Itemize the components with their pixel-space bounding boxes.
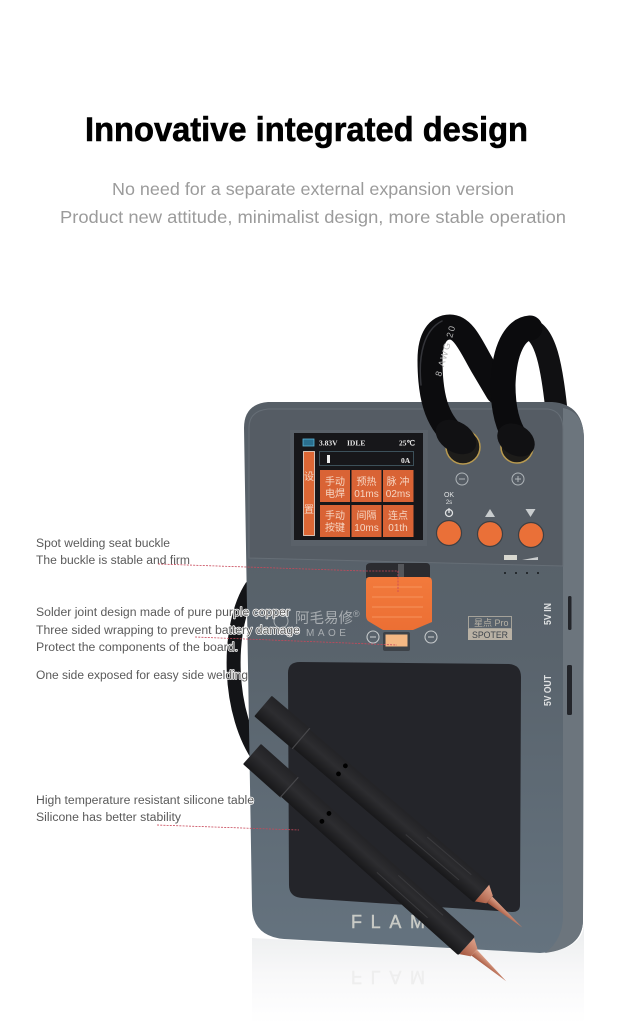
power icon: OK 2s: OK: [444, 492, 454, 499]
menu cells: 01ms: [354, 489, 379, 500]
cable: plus rear strand: [528, 329, 556, 406]
brand badge: SPOTER: 星点 Pro: [474, 618, 509, 628]
menu cells: 01th: [388, 523, 408, 534]
product: spot welder device: [234, 321, 584, 1024]
menu cells: [320, 470, 414, 537]
brand badge: SPOTER: SPOTER: [472, 630, 508, 641]
power icon: OK 2s: 2s: [446, 500, 452, 506]
polarity symbols: [456, 473, 524, 485]
menu cells: 手动: [325, 509, 345, 522]
floor reflection: [252, 925, 584, 1024]
subtitle text block: Product new attitude, minimalist design, more stable operation: [60, 207, 566, 227]
current bar: 0A: [401, 456, 411, 465]
annotation: silicone table: High temperature resistant silicone table: [36, 795, 254, 807]
menu cells: 按键: [325, 521, 345, 534]
welding pen: upper: [254, 696, 531, 938]
annotation: buckle: [36, 538, 398, 592]
brand: FLAM: FLAM: [351, 912, 425, 932]
orange buckle: [366, 577, 432, 630]
welding pen: lower: [243, 744, 515, 991]
status row: 25℃: [399, 438, 416, 448]
menu cells: 脉 冲: [387, 475, 409, 488]
watermark logo: MAOE: [306, 628, 349, 639]
side ports: [567, 596, 572, 715]
watermark logo: [274, 609, 360, 639]
buckle slot: [366, 563, 430, 578]
settings bar: [304, 452, 314, 536]
annotation: silicone table: [36, 795, 299, 830]
status row: IDLE: [347, 438, 365, 448]
status row: 3.83V: [319, 438, 338, 448]
settings bar: 置: [304, 504, 314, 516]
label: 5V IN: 5V IN: [543, 603, 554, 625]
indicator dots: [504, 572, 539, 574]
display screen: [294, 433, 423, 540]
screen bezel line: [290, 430, 428, 546]
cable: plus: [491, 328, 541, 463]
brand badge: SPOTER: [468, 616, 512, 641]
floor reflection: FLAM: [351, 967, 425, 987]
right side band: [545, 408, 584, 953]
settings bar: 设: [304, 471, 314, 483]
cable: minus: [420, 321, 498, 461]
menu cells: 电焊: [325, 487, 345, 500]
battery level indicator: [504, 555, 538, 560]
top control panel: [249, 409, 563, 566]
cable print: 8AWG: 8 AWG 20: [433, 323, 458, 378]
annotation: solder joint: [36, 607, 397, 682]
cable behind device: [234, 586, 262, 762]
device body: [244, 402, 584, 953]
buckle minus symbols: [367, 631, 437, 643]
menu cells: 预热: [356, 475, 376, 488]
status row: [319, 438, 416, 448]
menu cells: 间隔: [356, 509, 376, 522]
subtitle text block: No need for a separate external expansion version: [112, 179, 514, 199]
title: Innovative integrated design: [85, 111, 528, 149]
menu cells: 连点: [388, 509, 408, 522]
buckle stem: [398, 564, 404, 578]
cable terminals: [446, 430, 533, 464]
annotation: solder joint: Three sided wrapping to prevent battery damage: [36, 625, 300, 637]
annotation: solder joint: Solder joint design made of pure purple copper: [36, 607, 290, 619]
menu cells: 手动: [325, 475, 345, 488]
annotation: buckle: The buckle is stable and firm: [36, 555, 190, 567]
copper solder joint: [383, 632, 410, 651]
annotation: buckle: Spot welding seat buckle: [36, 538, 170, 550]
orange buttons: [436, 520, 544, 548]
power icon: OK 2s: [444, 492, 454, 516]
silicone pad: [288, 662, 521, 912]
arrow: up: [485, 509, 495, 517]
annotation: silicone table: Silicone has better stability: [36, 812, 181, 824]
arrow: down: [526, 509, 536, 517]
menu cells: 10ms: [354, 523, 379, 534]
subtitle text block: [60, 179, 566, 227]
annotation: solder joint: One side exposed for easy side welding: [36, 670, 248, 682]
watermark logo: 阿毛易修: [295, 611, 353, 627]
watermark logo: ®: [353, 609, 360, 619]
annotation: solder joint: Protect the components of the board.: [36, 642, 238, 654]
battery icon: [303, 439, 314, 446]
label: 5V OUT: 5V OUT: [543, 675, 554, 706]
menu cells: 02ms: [386, 489, 410, 500]
